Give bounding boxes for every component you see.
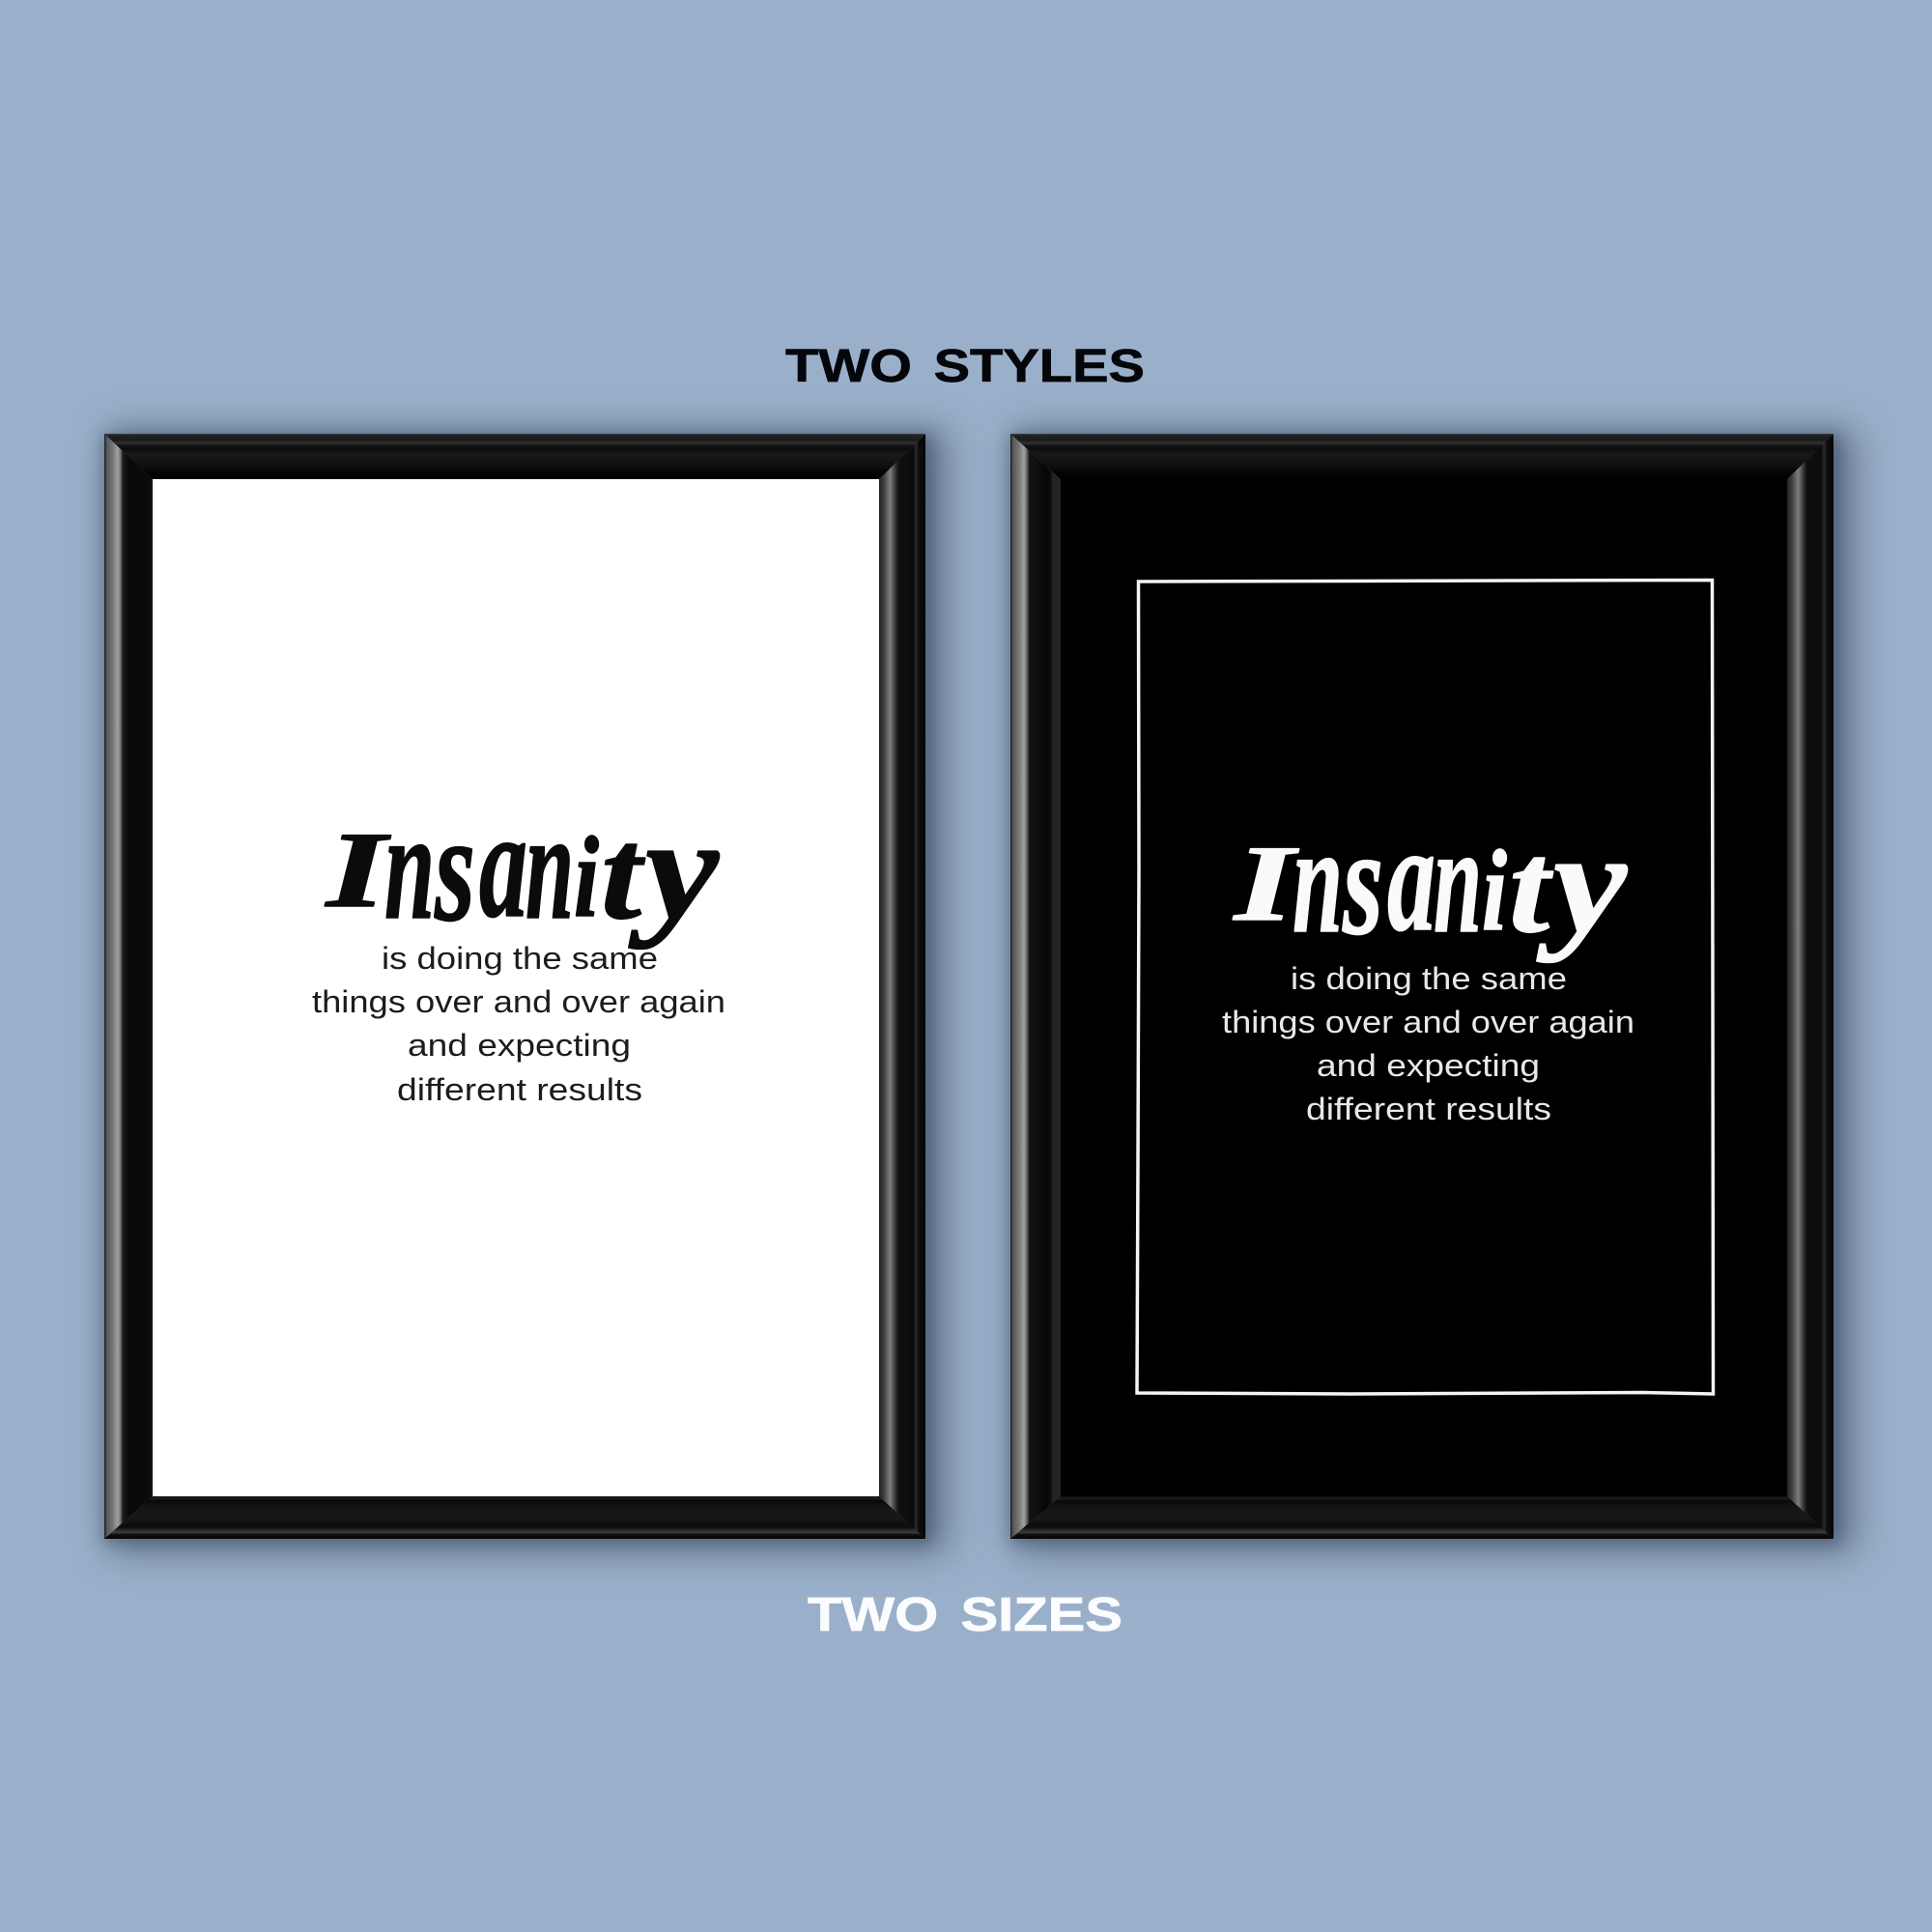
quote title: Insanity: y xyxy=(1536,803,1629,963)
quote body text: and expecting xyxy=(408,1028,631,1063)
quote body text xyxy=(312,941,725,1107)
quote body text: and expecting xyxy=(1317,1048,1540,1083)
quote title: Insanity: I xyxy=(324,810,391,930)
quote title: Insanity: i xyxy=(1482,826,1507,954)
quote title: Insanity: s xyxy=(1342,795,1383,967)
quote body text: different results xyxy=(397,1072,642,1107)
quote body text: things over and over again xyxy=(1222,1005,1634,1039)
frame: black style poster xyxy=(1010,434,1833,1539)
left frame drop shadow xyxy=(104,429,949,1553)
frame moulding: top side xyxy=(1010,434,1833,479)
frame moulding: top side xyxy=(104,434,925,479)
quote title: Insanity: n xyxy=(1293,793,1343,965)
quote body text: different results xyxy=(1306,1092,1551,1126)
hand-drawn white border xyxy=(1137,580,1714,1394)
quote title: Insanity: n xyxy=(526,780,574,952)
frame moulding: right side xyxy=(1787,434,1833,1539)
frame moulding: left side xyxy=(104,434,153,1539)
frame: white style poster xyxy=(104,434,925,1539)
quote title: Insanity: t xyxy=(1509,816,1553,960)
quote title: Insanity: n xyxy=(1434,793,1482,965)
heading: two styles: TWO STYLES xyxy=(785,341,1145,392)
poster: black sheet xyxy=(1061,479,1787,1496)
quote title: Insanity: a xyxy=(479,778,527,950)
quote body text: is doing the same xyxy=(1291,961,1567,996)
poster: white sheet xyxy=(153,479,879,1496)
frame moulding: left side xyxy=(1010,434,1061,1539)
quote title: Insanity: I xyxy=(1232,824,1299,944)
quote body text xyxy=(1222,961,1634,1126)
quote title: Insanity: y xyxy=(628,789,721,950)
quote title: Insanity: n xyxy=(384,780,435,952)
frame moulding: bottom side xyxy=(104,1496,925,1539)
quote body text: is doing the same xyxy=(382,941,658,976)
quote title: Insanity: s xyxy=(434,781,475,953)
frame moulding: bottom side xyxy=(1010,1496,1833,1539)
quote title: Insanity: i xyxy=(574,812,599,941)
quote body text: things over and over again xyxy=(312,984,725,1019)
quote title: Insanity: t xyxy=(601,803,645,947)
quote title: Insanity: a xyxy=(1387,791,1435,963)
heading: two sizes: TWO SIZES xyxy=(808,1589,1122,1641)
frame moulding: right side xyxy=(879,434,925,1539)
right frame drop shadow xyxy=(1010,429,1857,1553)
